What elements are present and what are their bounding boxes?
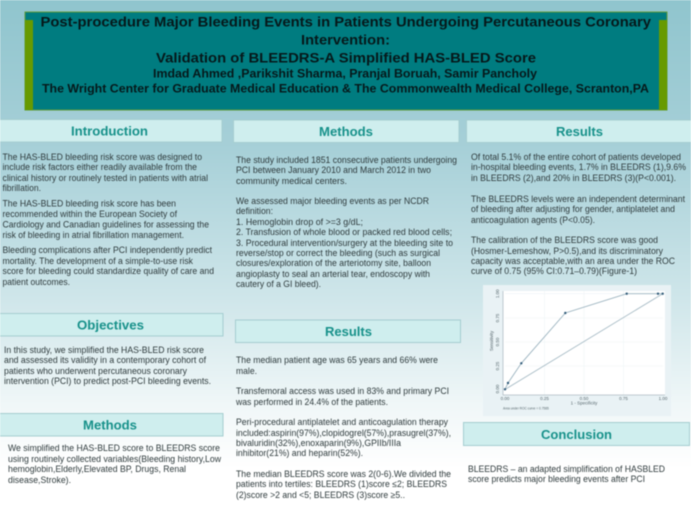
title banner: Imdad Ahmed ,Parikshit Sharma, Pranjal Boruah, Samir Pancholy	[153, 68, 538, 80]
text block: results right: capacity was acceptable,with an area under the ROC	[471, 256, 675, 266]
text block: results right: of bleeding after adjusting for gender, antiplatelet and	[471, 204, 675, 214]
text block: methods left: disease,Stroke).	[8, 475, 71, 485]
text block: conclusion	[468, 464, 665, 484]
chart: ROC curve: 0.00	[501, 396, 510, 401]
text block: results centre: male.	[236, 366, 257, 376]
text block: results centre: The median patient age was 65 years and 66% were	[236, 355, 438, 365]
text block: results right: curve of 0.75 (95% CI:0.71–0.79)(Figure-1)	[471, 266, 637, 276]
text block: results right: Of total 5.1% of the entire cohort of patients developed	[471, 152, 681, 162]
panel: results right	[466, 120, 691, 276]
heading: methods centre	[234, 120, 459, 142]
text block: results right: The calibration of the BLEEDRS score was good	[471, 235, 658, 245]
text block: methods centre: 2. Transfusion of whole blood or packed red blood cells;	[236, 227, 452, 237]
panel: conclusion	[464, 422, 690, 484]
text block: introduction: The HAS-BLED bleeding risk score has been	[2, 198, 176, 208]
text block: introduction: recommended within the European Society of	[2, 209, 177, 219]
text block: results right: in BLEEDRS (2),and 20% in BLEEDRS (3)(P<0.001).	[471, 173, 676, 183]
text block: methods centre: PCI between January 2010 and March 2012 in two	[236, 165, 431, 175]
chart: ROC curve: 0.75	[619, 396, 628, 401]
text block: results centre: The median BLEEDRS score was 2(0-6).We divided the	[236, 469, 451, 479]
text block: introduction: fibrillation.	[2, 183, 41, 193]
text block: results centre: Transfemoral access was used in 83% and primary PCI	[236, 386, 449, 396]
text block: methods centre: reverse/stop or correct the bleeding (such as surgical	[236, 248, 440, 258]
text block: introduction: score for bleeding could standardize quality of care and	[2, 266, 214, 276]
text block: results right: The BLEEDRS levels were an independent determinant	[471, 194, 685, 204]
text block: methods centre: angioplasty to seal an arterial tear, endoscopy with	[236, 269, 430, 279]
chart: ROC curve: 0.75	[495, 313, 500, 322]
text block: introduction: The HAS-BLED bleeding risk score was designed to	[2, 152, 202, 162]
panel: results centre	[235, 320, 460, 500]
text block: methods centre: community medical centers.	[236, 176, 347, 186]
chart: ROC curve: 0.50	[495, 337, 500, 346]
text block: methods centre: cautery of a GI bleed).	[236, 279, 321, 289]
heading: results right: Results	[556, 124, 603, 139]
text block: results centre: patients into tertiles: BLEEDRS (1)score ≤2; BLEEDRS	[236, 479, 447, 489]
text block: methods left: hemoglobin,Elderly,Elevated BP, Drugs, Renal	[8, 464, 186, 474]
heading: methods centre: Methods	[319, 124, 373, 139]
chart: ROC curve: 1 - Specificity	[571, 400, 598, 406]
text block: methods centre: 1. Hemoglobin drop of >=3 g/dL;	[236, 217, 363, 227]
heading: methods left	[0, 414, 223, 436]
heading: introduction: Introduction	[71, 124, 148, 138]
text block: results centre: was performed in 24.4% of the patients.	[235, 397, 388, 407]
text block: results right: (Hosmer-Lemeshow, P>0.5),and its discriminatory	[471, 246, 663, 256]
text block: methods centre	[236, 155, 457, 289]
chart: ROC curve: Sensitivity	[489, 330, 494, 351]
text block: introduction	[2, 152, 214, 287]
chart: ROC curve: 1.00	[659, 396, 668, 401]
chart: ROC curve: 0.25	[495, 361, 500, 370]
text block: introduction: Bleeding complications after PCI independently predict	[2, 245, 212, 255]
text block: introduction: mortality. The development of a simple-to-use risk	[2, 256, 193, 266]
text block: objectives	[4, 345, 211, 386]
text block: conclusion: BLEEDRS – an adapted simplification of HASBLED	[468, 464, 665, 474]
chart: ROC curve: Area under ROC curve = 0.7565	[503, 406, 549, 410]
text block: results centre: Peri-procedural antiplatelet and anticoagulation therapy	[236, 417, 448, 427]
title banner: Intervention:	[301, 32, 390, 48]
text block: results right	[471, 152, 686, 276]
heading: results right	[466, 120, 691, 142]
heading: introduction	[0, 120, 222, 142]
text block: results centre	[235, 355, 451, 500]
panel: methods centre	[234, 120, 459, 289]
text block: introduction: clinical history or routinely tested in patients with atrial	[2, 173, 208, 183]
text block: methods left	[8, 443, 221, 485]
text block: results centre: inhibitor(21%) and heparin(52%).	[236, 448, 363, 458]
text block: methods centre: closures/exploration of the arteriotomy site, balloon	[236, 258, 431, 268]
heading: objectives	[0, 314, 223, 336]
chart: ROC curve: 0.50	[580, 396, 589, 401]
panel: introduction	[0, 120, 222, 287]
text block: introduction: risk of bleeding in atrial fibrillation management.	[2, 230, 184, 240]
text block: introduction: patient outcomes.	[2, 277, 70, 287]
text block: objectives: patients who underwent percutaneous coronary	[4, 366, 187, 376]
panel: objectives	[0, 314, 223, 386]
heading: results centre: Results	[325, 324, 372, 339]
panel: methods left	[0, 414, 223, 485]
text block: methods centre: definition:	[236, 206, 273, 216]
text block: methods left: using routinely collected variables(Bleeding history,Low	[8, 454, 221, 464]
text block: results right: in-hospital bleeding events, 1.7% in BLEEDRS (1),9.6%	[471, 162, 686, 172]
text block: objectives: intervention (PCI) to predict post-PCI bleeding events.	[4, 376, 211, 386]
text block: results right: anticoagulation agents (P<0.05).	[471, 215, 595, 225]
text block: introduction: include risk factors either readily available from the	[2, 162, 197, 172]
heading: results centre	[236, 320, 460, 342]
text block: introduction: Cardiology and Canadian guidelines for assessing the	[2, 220, 209, 230]
chart: ROC curve	[483, 285, 671, 416]
title banner: Post-procedure Major Bleeding Events in Patients Undergoing Percutaneous Coronary	[40, 14, 652, 30]
title banner	[25, 12, 667, 110]
text block: results centre: included:aspirin(97%),clopidogrel(57%),prasugrel(37%),	[236, 428, 451, 438]
heading: objectives: Objectives	[77, 318, 144, 332]
text block: results centre: bivaluridin(32%),enoxaparin(9%),GPIIb/IIIa	[236, 438, 401, 448]
heading: methods left: Methods	[83, 418, 137, 432]
text block: conclusion: score predicts major bleeding events after PCI	[468, 474, 645, 484]
heading: conclusion	[464, 422, 690, 446]
text block: methods left: We simplified the HAS-BLED score to BLEEDRS score	[8, 443, 220, 453]
text block: results centre: (2)score >2 and <5; BLEEDRS (3)score ≥5..	[236, 490, 405, 500]
text block: objectives: In this study, we simplified the HAS-BLED risk score	[4, 345, 204, 355]
title banner: The Wright Center for Graduate Medical Education & The Commonwealth Medical College, Scranton,PA	[42, 84, 649, 96]
chart: ROC curve: 1.00	[495, 289, 500, 298]
chart: ROC curve: 0.00	[495, 384, 500, 393]
title banner: Validation of BLEEDRS-A Simplified HAS-BLED Score	[156, 50, 537, 66]
text block: methods centre: 3. Procedural intervention/surgery at the bleeding site to	[236, 238, 453, 248]
text block: methods centre: We assessed major bleeding events as per NCDR	[236, 196, 429, 206]
text block: methods centre: The study included 1851 consecutive patients undergoing	[236, 155, 457, 165]
chart: ROC curve: 0.25	[540, 396, 549, 401]
heading: conclusion: Conclusion	[541, 427, 612, 442]
text block: objectives: and assessed its validity in a contemporary cohort of	[4, 355, 206, 365]
